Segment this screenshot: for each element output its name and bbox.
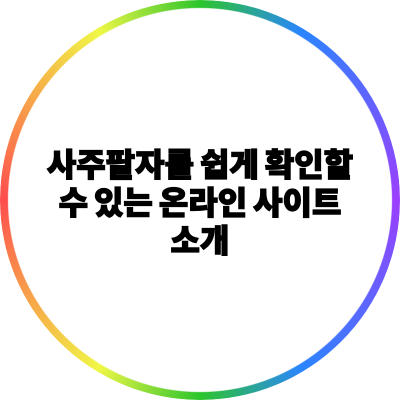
title (46, 140, 353, 262)
title line 3: 소개 (171, 216, 229, 262)
title line 1: 사주팔자를 쉽게 확인할 (47, 140, 353, 186)
title line 2: 수 있는 온라인 사이트 (59, 178, 341, 224)
